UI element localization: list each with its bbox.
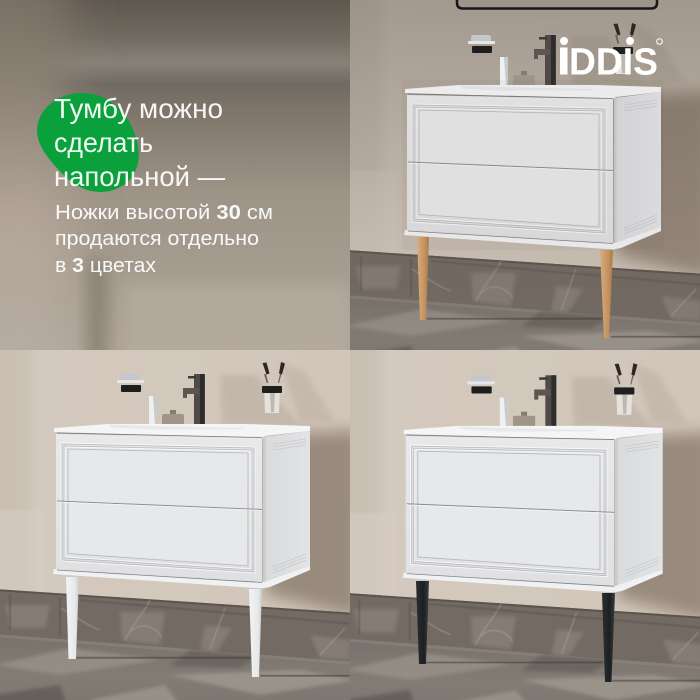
heading: напольной — [54,161,225,192]
cabinet with sink [53,362,310,588]
subheading: продаются отдельно [55,228,259,250]
black legs [416,581,615,682]
white legs [66,577,262,677]
panel: cabinet with wooden legs [350,0,700,350]
heading: сделать [54,127,153,158]
panel: cabinet with white legs [0,330,360,700]
room: wall and floor [350,0,700,350]
subheading: Ножки высотой 30 см [55,202,273,224]
cabinet with sink [403,363,663,592]
panel: blurred background with text [0,0,350,350]
green blob [37,93,139,192]
subheading [55,202,273,277]
heading [54,98,226,186]
logo: IDDIS [560,37,663,75]
heading: Тумбу можно [54,93,223,124]
room: wall and floor [344,331,700,700]
icon: mirror [457,0,657,8]
subheading: в 3 цветах [55,255,156,277]
logo: IDDIS: DDIS [569,42,658,84]
wooden legs [417,237,613,338]
cabinet with sink [404,23,661,250]
panel: cabinet with black legs [344,331,700,700]
room: wall and floor [0,330,360,700]
